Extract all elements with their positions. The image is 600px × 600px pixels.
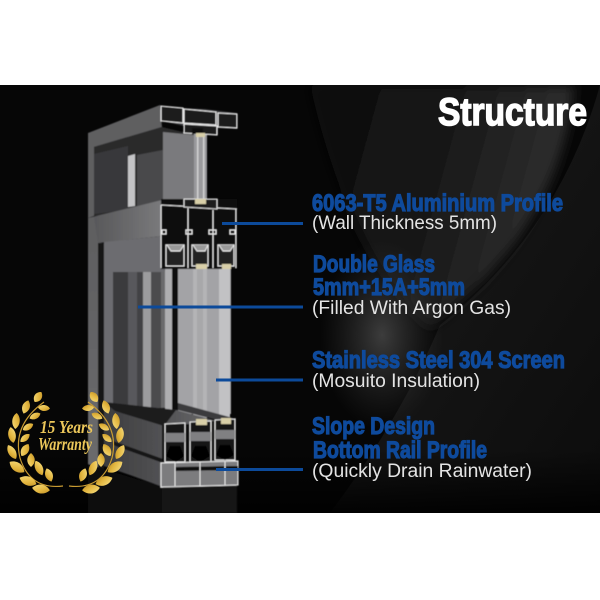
bottom sill slope <box>88 402 215 513</box>
warranty text: 15 Years <box>40 417 93 437</box>
floor reflection <box>162 486 237 513</box>
callout: double glass: Double Glass <box>313 251 435 278</box>
laurel stems <box>18 402 114 486</box>
bottom rail profile <box>161 418 238 487</box>
callout: stainless steel screen: (Mosuito Insulation) <box>312 371 480 392</box>
infographic canvas <box>0 85 600 513</box>
window cross-section <box>88 105 238 513</box>
callout: aluminium profile <box>312 190 563 234</box>
warranty laurel badge <box>5 390 127 495</box>
upper glass <box>194 133 207 200</box>
head rail profile <box>161 106 237 137</box>
callout: slope design: Slope Design <box>312 413 435 440</box>
outer left side and lower band <box>88 210 118 468</box>
callout: slope design: (Quickly Drain Rainwater) <box>312 461 532 482</box>
middle rail profile <box>161 199 237 269</box>
dark background panel <box>0 85 600 513</box>
callout: stainless steel screen <box>312 347 565 392</box>
callout leader lines <box>138 222 303 471</box>
callout: slope design: Bottom Rail Profile <box>313 437 487 464</box>
callout: double glass <box>312 251 511 319</box>
main glass panes <box>178 268 233 424</box>
callout: aluminium profile: (Wall Thickness 5mm) <box>312 213 497 234</box>
callout: double glass: 5mm+15A+5mm <box>313 274 465 301</box>
warranty laurel badge: Warranty <box>38 434 93 454</box>
outer frame wall <box>88 105 162 218</box>
insect screen mesh <box>113 268 178 412</box>
callout: double glass: (Filled With Argon Gas) <box>312 298 511 319</box>
laurel leaves <box>5 390 127 495</box>
callout: slope design <box>312 413 532 482</box>
